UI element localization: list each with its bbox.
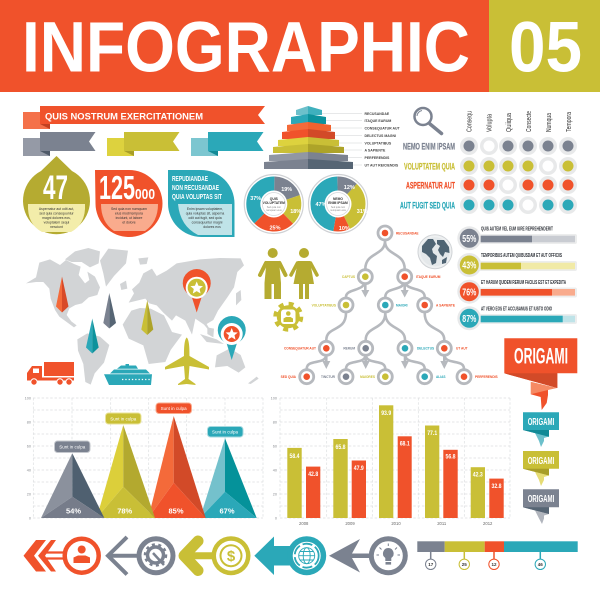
progress row: 55%: 55% (462, 234, 476, 245)
axis labels: 40 (27, 468, 31, 472)
pyramid labels: VOLUPTATIBUS (364, 142, 392, 146)
percent labels (66, 506, 235, 516)
map pin: star orange (183, 269, 211, 312)
triangle: teal (200, 438, 257, 518)
percent labels: 67% (219, 506, 235, 516)
map pin: olive (141, 300, 153, 335)
donut chart 2: 10% (339, 226, 350, 232)
year labels: 2010 (391, 521, 401, 526)
percent labels: 78% (117, 506, 133, 516)
drop: 47: 47 (43, 169, 68, 207)
pyramid labels: PERFERENDIS (364, 156, 390, 160)
tag: orange (156, 403, 192, 414)
donut chart 2: numquam eius (330, 209, 347, 212)
drop: 47: sed quia consequuntur (39, 212, 75, 216)
donut chart 2: NEMO (333, 197, 343, 201)
icon: airplane (165, 338, 209, 385)
bars 2008: 42.8 (308, 471, 318, 478)
marker 12 (489, 552, 499, 570)
year labels: 2012 (483, 521, 493, 526)
column headers: Tempora (564, 111, 573, 132)
marker 46 (535, 552, 546, 570)
pyramid labels: CONSEQUATUR AUT (364, 126, 401, 130)
bars 2012 (471, 467, 504, 518)
axis labels: 0 (29, 516, 31, 520)
column headers: Volupta (484, 113, 494, 132)
marker 17: 17 (428, 562, 434, 567)
tree labels: A SAPIENTE (436, 304, 455, 308)
progress row: 76%: 76% (462, 287, 476, 298)
year labels: 2009 (345, 521, 355, 526)
tree connectors (307, 241, 464, 369)
tree labels: PERFERENDIS (475, 375, 498, 379)
year labels: 2008 (299, 521, 309, 526)
donut chart 2: ENIM IPSAM (328, 201, 348, 205)
bars 2009: 47.9 (354, 465, 364, 472)
bars 2009: 65.8 (336, 444, 346, 451)
world map (26, 248, 259, 385)
icon: truck (27, 362, 74, 385)
row: aut fugit (400, 196, 577, 214)
row: aut fugit: AUT FUGIT SED QUIA (400, 200, 455, 210)
drop: 47: Aspernatur aut odit aut, (39, 207, 74, 211)
tree labels (281, 232, 498, 379)
row: aspernatur: ASPERNATUR AUT (406, 180, 455, 190)
bars 2012: 42.3 (473, 472, 483, 478)
tag: olive (106, 413, 141, 424)
stacked bar (417, 541, 578, 570)
icon: man (260, 248, 286, 299)
axis labels: 100 (25, 396, 31, 400)
axis labels (271, 396, 277, 520)
bars 2011: 77.1 (427, 430, 437, 437)
matrix table (400, 111, 577, 214)
map pin: teal (86, 318, 99, 354)
origami teal: ORIGAMI (528, 416, 554, 428)
drop: 125 000 (95, 169, 162, 237)
pyramid labels (322, 112, 401, 168)
donut chart 1: 37% (250, 196, 261, 202)
donut chart 1: 25% (269, 226, 281, 232)
bar chart (271, 396, 510, 526)
progress row: 87%: 87% (462, 314, 476, 325)
ribbon: gray (23, 132, 96, 156)
pyramid labels: UT AUT REICIENDIS (364, 164, 399, 168)
bars 2009 (333, 439, 366, 518)
bars 2010: 93.9 (381, 410, 391, 417)
donut chart 1 (244, 174, 303, 234)
tag: teal (208, 426, 243, 437)
pyramid chart (264, 106, 401, 169)
bars 2011: 56.8 (446, 454, 456, 460)
tree labels: ITAQUE EARUM (416, 275, 441, 279)
tree labels: DELECTUS (417, 346, 434, 350)
origami gray (523, 489, 559, 524)
map pin: gray (103, 293, 116, 328)
donut chart 1: QUIS (270, 197, 279, 201)
icon: woman (291, 248, 317, 299)
pyramid labels: A SAPIENTE (364, 148, 386, 152)
pyramid labels: ITAQUE EARUM (364, 119, 391, 123)
origami gray: ORIGAMI (528, 493, 554, 505)
progress row: 55% (457, 226, 577, 250)
tree labels: CAPTUS (342, 275, 355, 279)
pyramid labels: RECUSANDAE (364, 112, 390, 116)
chart grid (33, 398, 263, 518)
drop: 47: voluptatem sequi (44, 220, 70, 224)
donut chart 1: 18% (290, 209, 301, 215)
progress row: 76% (457, 280, 577, 304)
axis labels: 80 (27, 420, 31, 424)
progress row: 87% (457, 306, 577, 330)
tag: olive: Sunt in culpa (110, 416, 137, 421)
row: aspernatur (406, 176, 577, 194)
bars 2012: 32.8 (492, 483, 502, 490)
tree labels: MAIORES (360, 375, 375, 379)
year labels: 2011 (437, 521, 447, 526)
bars 2010: 68.1 (400, 440, 410, 448)
drop: 125 000: et dolore (122, 220, 136, 224)
drop: teal text card: QUIA VOLUPTAS SIT (172, 192, 222, 201)
tree labels: RECUSANDAE (396, 232, 418, 236)
drop: teal text card: quia voluptas sit, asperna (186, 212, 224, 216)
header banner (0, 0, 600, 92)
origami large (504, 338, 577, 410)
drop: teal text card: Enim ipsam voluptatem, (187, 207, 223, 211)
column headers: Consequ (464, 111, 474, 132)
triangle: olive (97, 425, 155, 518)
bars 2008 (287, 448, 320, 518)
drop: 47 (23, 156, 90, 234)
pyramid labels: DELECTUS MAGNI (364, 134, 396, 138)
origami olive: ORIGAMI (528, 455, 554, 467)
donut chart 1: 19% (281, 187, 292, 193)
marker 25: 25 (462, 562, 467, 567)
percent labels: 85% (168, 506, 184, 516)
ribbon: main heading (23, 106, 265, 129)
icon: ship (104, 364, 152, 385)
marker 25 (459, 552, 469, 570)
donut chart 1: Sed quia non (267, 206, 282, 209)
triangle chart (25, 396, 263, 520)
drop: 47: magni dolores eos, (42, 216, 71, 220)
map pin: orange (56, 276, 68, 312)
axis labels: 20 (273, 492, 277, 496)
bars 2008: 58.4 (290, 453, 300, 460)
percent labels: 54% (66, 506, 81, 516)
tree labels: VOLUPTATIBUS (312, 304, 336, 308)
drop: 47: nesciunt (50, 225, 63, 229)
axis labels (25, 396, 31, 520)
ribbon: main heading: QUIS NOSTRUM EXERCITATIONEM (45, 112, 203, 122)
drop: 125 000: Sed quia non numquam (111, 207, 147, 211)
drop: teal text card: odit aut fugit, sed quia (188, 216, 222, 220)
axis labels: 80 (273, 420, 277, 424)
triangle: gray (41, 453, 104, 518)
title: INFOGRAPHIC (22, 8, 470, 88)
flow tree (281, 226, 498, 384)
tree labels: CONSEQUATUR AUT (284, 346, 316, 350)
arrow: olive dollar: $ (227, 548, 236, 565)
arrow: teal globe (254, 536, 326, 575)
drop: 125 000: 125 (99, 169, 135, 206)
drop: teal text card: REPUDIANDAE (172, 174, 208, 183)
drop: teal text card: dolores eos (203, 225, 221, 229)
tree labels: SED QUIA (281, 375, 297, 379)
column headers: Consecte (524, 111, 533, 132)
arrow: orange person (24, 539, 99, 573)
marker 12: 12 (491, 562, 497, 567)
axis labels: 20 (27, 492, 31, 496)
row: voluptatem: VOLUPTATEM QUIA (404, 162, 455, 172)
row: nemo (403, 137, 577, 155)
arrow: olive dollar (184, 536, 250, 575)
chart grid (280, 398, 510, 518)
triangle: orange (148, 416, 206, 518)
donut chart 2: 12% (344, 185, 355, 191)
issue number: 05 (509, 8, 582, 88)
tag: gray: Sunt in culpa (59, 445, 86, 450)
column headers: Numqua (544, 112, 553, 132)
donut chart 2: 31% (357, 209, 368, 215)
row: voluptatem (404, 157, 577, 175)
donut chart 1: VOLUPTATEM (263, 201, 285, 205)
marker 46: 46 (538, 562, 543, 567)
drop: teal text card (168, 170, 234, 237)
bars 2011 (425, 426, 458, 518)
progress row: 43% (457, 253, 577, 277)
icon: magnifier (414, 108, 442, 134)
origami olive (523, 451, 559, 486)
drop: 125 000: 000 (135, 186, 155, 203)
tag: orange: Sunt in culpa (161, 406, 187, 411)
bars 2010 (379, 405, 412, 518)
drop: 125 000: incidunt, ut labore (116, 216, 142, 220)
arrow: gray gear (108, 536, 176, 575)
origami teal (523, 412, 559, 447)
tree labels: MAIORI (396, 304, 408, 308)
tree labels: UT AUT (456, 346, 468, 350)
axis labels: 60 (273, 444, 277, 448)
axis labels: 60 (27, 444, 31, 448)
tag: teal: Sunt in culpa (212, 430, 238, 435)
axis labels: 100 (271, 396, 277, 400)
donut chart 1: numquam eius (266, 209, 282, 212)
axis labels: 40 (273, 468, 277, 472)
year labels (299, 521, 493, 526)
progress row: 43%: 43% (462, 261, 476, 272)
drop: teal text card: NON RECUSANDAE (172, 183, 219, 192)
tree labels: TINCTUR (321, 375, 336, 379)
donut chart 2 (308, 174, 368, 234)
tag: gray (54, 441, 90, 452)
tree nodes (300, 226, 471, 384)
arrow: gray bulb (329, 536, 408, 575)
map pin: star teal (218, 316, 246, 360)
donut chart 2: 47% (315, 202, 327, 208)
icon: gear with person (275, 304, 301, 330)
tree labels: ALIAS (436, 375, 446, 379)
column headers: Quiiqua (504, 112, 513, 132)
tree labels: RERUM (343, 346, 355, 350)
axis labels: 0 (275, 516, 277, 520)
column headers (464, 111, 573, 132)
row: nemo: NEMO ENIM IPSAM (403, 142, 455, 152)
drop: teal text card: consequuntur magni (192, 220, 223, 224)
drop: 125 000: eius modi tempora (115, 212, 143, 216)
marker 17 (426, 552, 436, 570)
ribbon: olive (107, 132, 180, 156)
ribbon: teal (191, 132, 264, 156)
donut chart 2: Sed quia non (331, 206, 346, 209)
icon: globe (418, 235, 452, 269)
tree node dots (303, 230, 467, 380)
